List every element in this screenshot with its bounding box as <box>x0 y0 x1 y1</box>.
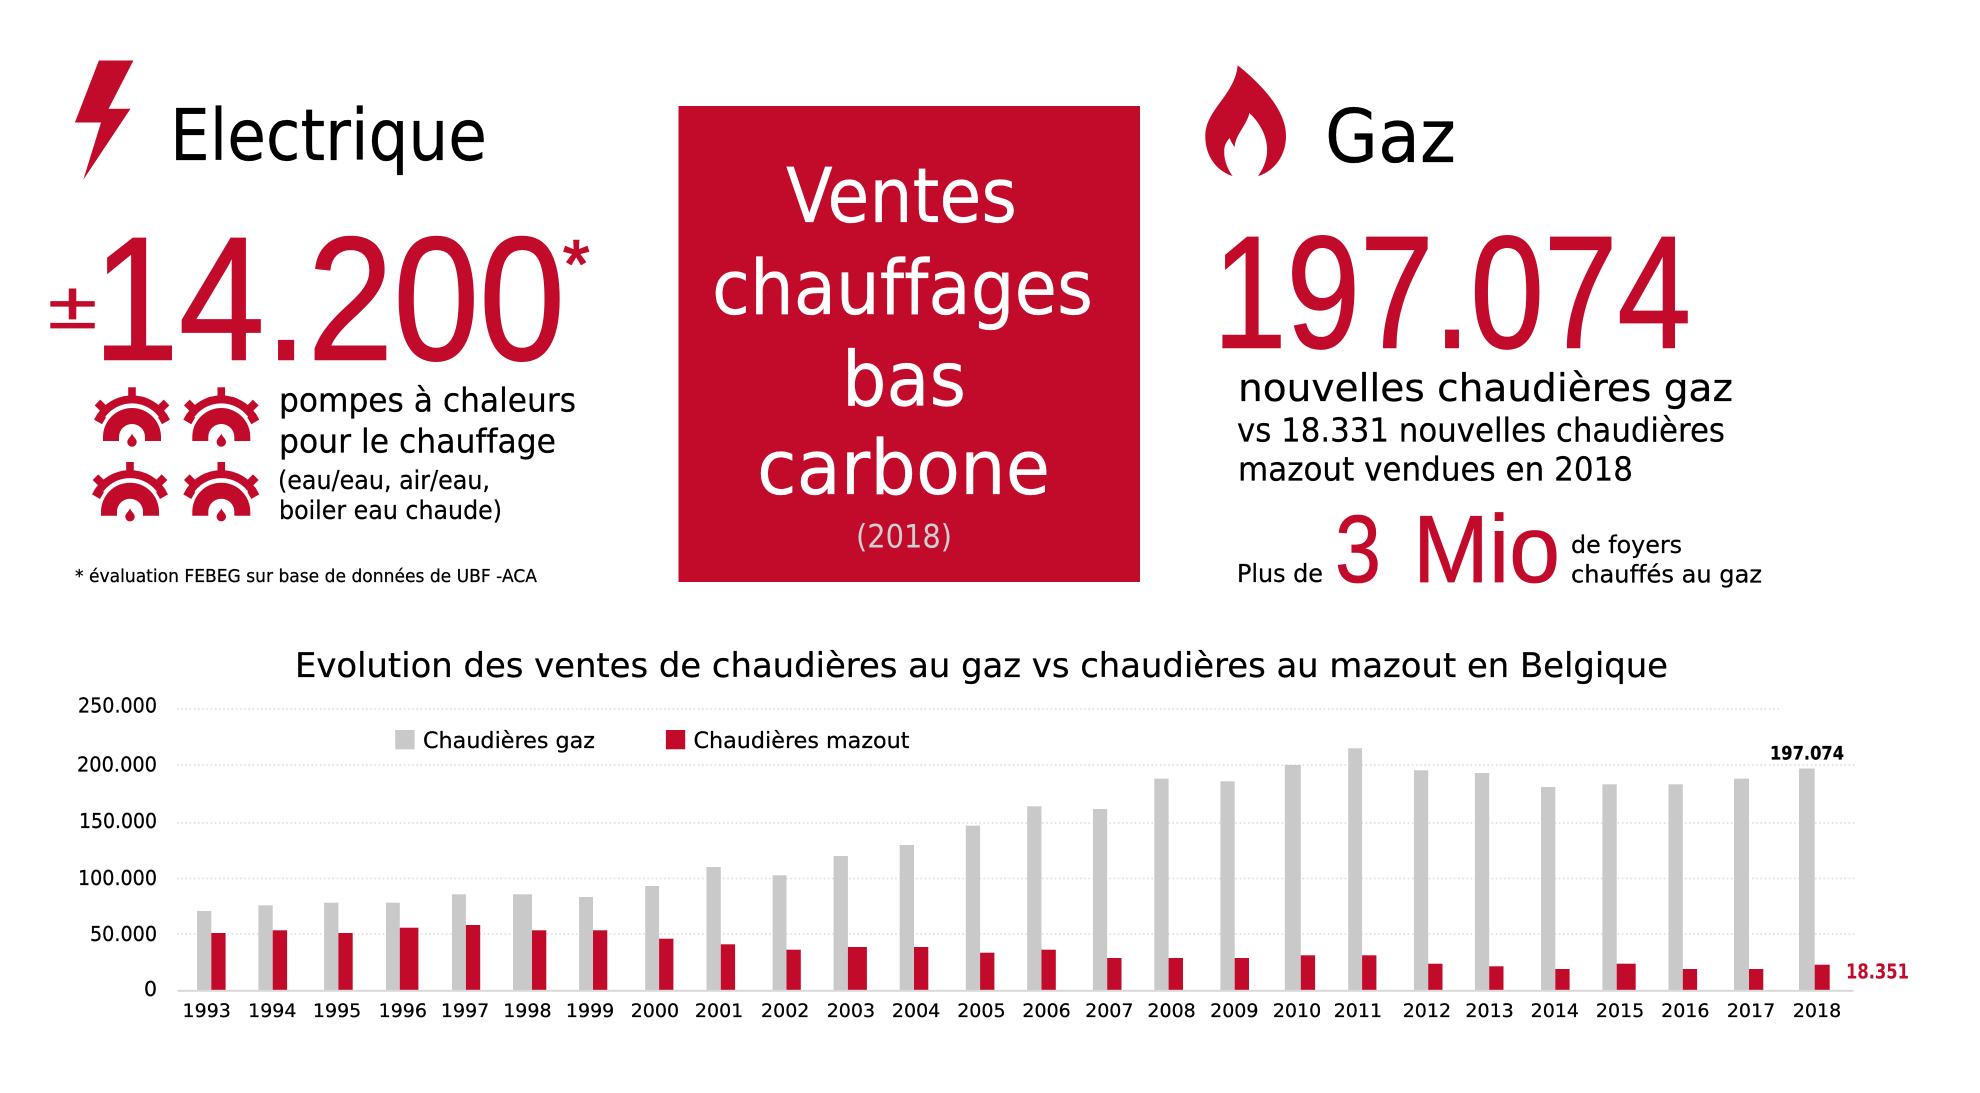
x axis year labels: 2006 <box>1022 1000 1071 1022</box>
icon: lightning bolt <box>75 60 133 180</box>
x axis year labels: 2009 <box>1210 1000 1258 1022</box>
callout: 3 Mio households <box>1237 496 1762 603</box>
title lines: bas <box>842 334 966 424</box>
x axis year labels: 2004 <box>892 1000 940 1022</box>
oil boiler bars <box>211 925 1830 990</box>
callout: 3 Mio households: de foyers <box>1571 531 1682 559</box>
legend: Chaudières gaz <box>423 729 595 754</box>
big number: 197.074: 197.074 <box>1213 202 1691 382</box>
callout: 3 Mio households: Mio <box>1413 496 1560 603</box>
y axis labels: 150.000 <box>79 809 157 833</box>
y axis labels: 250.000 <box>78 694 157 718</box>
text: new boilers: vs 18.331 nouvelles chaudières <box>1237 410 1725 450</box>
big number: 14.200: ± <box>48 268 97 342</box>
x axis year labels: 2011 <box>1334 1000 1382 1022</box>
y axis labels: 0 <box>144 977 157 1001</box>
text: new boilers <box>1237 366 1733 488</box>
big number: 14.200: 14.200 <box>93 202 565 398</box>
title lines <box>712 151 1093 512</box>
legend <box>395 729 910 754</box>
callout: 3 Mio households: chauffés au gaz <box>1571 560 1762 588</box>
x axis year labels: 2003 <box>827 1000 875 1022</box>
big number: 14.200: * <box>563 226 589 302</box>
chart heading: Evolution des ventes de chaudières au gaz vs chaudières au mazout en Belgique <box>295 646 1668 686</box>
bar chart: boiler sales 1993-2018 <box>77 694 1909 1022</box>
x axis year labels: 2016 <box>1661 1000 1709 1022</box>
x axis year labels: 2015 <box>1596 1000 1644 1022</box>
x axis year labels: 2001 <box>695 1000 743 1022</box>
icon: heat pump 3 <box>94 462 166 521</box>
text: heat pump description: pour le chauffage <box>279 422 556 460</box>
x axis year labels: 1996 <box>379 1000 427 1022</box>
icon: heat pump 1 <box>96 387 168 447</box>
x axis year labels: 2014 <box>1531 1000 1579 1022</box>
text: heat pump description: pompes à chaleurs <box>279 380 576 420</box>
title lines: carbone <box>757 423 1050 512</box>
text: new boilers: mazout vendues en 2018 <box>1238 450 1633 488</box>
heading: Electrique: Electrique <box>170 94 487 177</box>
y axis labels: 50.000 <box>90 922 157 946</box>
x axis year labels: 2008 <box>1147 1000 1196 1022</box>
text: heat pump description <box>278 380 576 526</box>
x axis year labels: 1999 <box>566 1000 614 1022</box>
x axis year labels: 1997 <box>441 1000 489 1022</box>
footnote: * évaluation FEBEG sur base de données de UBF -ACA <box>75 566 538 587</box>
x axis year labels: 2002 <box>761 1000 809 1022</box>
year: (2018) <box>856 518 952 556</box>
data label: 2018 oil: 18.351 <box>1846 960 1909 984</box>
icon: heat pump 2 <box>185 387 257 447</box>
x axis year labels: 1993 <box>183 1000 231 1022</box>
y axis labels: 100.000 <box>78 866 157 890</box>
x axis year labels: 2012 <box>1403 1000 1451 1022</box>
y axis labels <box>77 694 157 1001</box>
y axis labels: 200.000 <box>77 752 157 776</box>
icon: heat pump 4 <box>185 462 257 521</box>
panel: gas heating <box>1205 65 1762 603</box>
x axis year labels: 2005 <box>957 1000 1006 1022</box>
panel: electric heating <box>48 60 589 587</box>
x axis year labels: 2018 <box>1793 1000 1841 1022</box>
x axis year labels: 2010 <box>1273 1000 1321 1022</box>
data label: 2018 gas: 197.074 <box>1770 742 1844 764</box>
callout: 3 Mio households: Plus de <box>1237 559 1323 588</box>
x axis year labels: 2013 <box>1465 1000 1514 1022</box>
x axis year labels: 2017 <box>1727 1000 1775 1022</box>
text: heat pump description: (eau/eau, air/eau, <box>278 466 490 496</box>
title lines: chauffages <box>712 243 1093 332</box>
x axis year labels <box>183 1000 1841 1022</box>
x axis year labels: 1995 <box>313 1000 361 1022</box>
callout: 3 Mio households: 3 <box>1335 496 1381 603</box>
x axis year labels: 2007 <box>1085 1000 1133 1022</box>
text: new boilers: nouvelles chaudières gaz <box>1238 366 1733 410</box>
x axis year labels: 1998 <box>503 1000 552 1022</box>
panel: central title block <box>678 106 1140 582</box>
x axis year labels: 1994 <box>248 1000 296 1022</box>
heading: Gaz: Gaz <box>1325 94 1456 180</box>
icon: flame <box>1205 65 1286 176</box>
legend: Chaudières mazout <box>694 729 910 754</box>
title lines: Ventes <box>786 151 1017 240</box>
gas boiler bars <box>197 748 1815 990</box>
text: heat pump description: boiler eau chaude) <box>279 496 502 526</box>
x axis year labels: 2000 <box>631 1000 679 1022</box>
